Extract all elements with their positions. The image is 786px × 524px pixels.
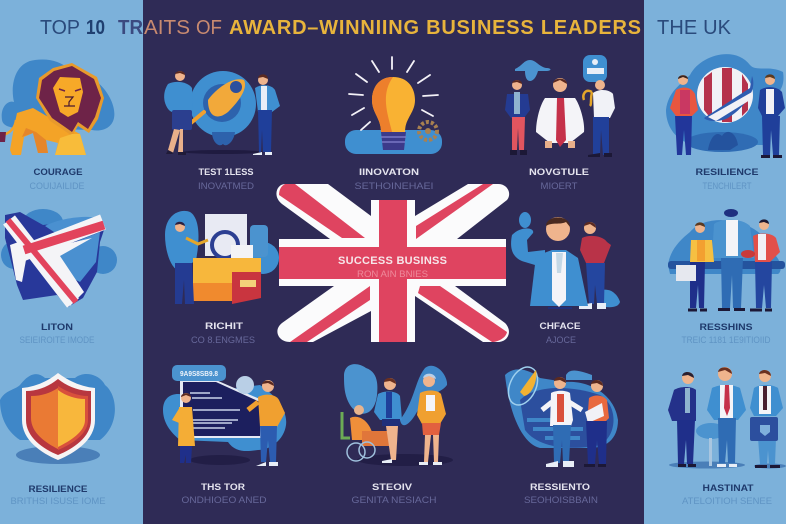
- label: steoiv: STEOIV: [372, 482, 413, 493]
- label: chface: AJOCE: [546, 335, 576, 345]
- label: chface: [540, 321, 580, 345]
- label: chface: CHFACE: [540, 321, 580, 332]
- label: courage: COURAGE: [34, 167, 82, 178]
- label: resshins: TREIC 1181 1E9ITIOIID: [682, 335, 771, 345]
- title: [40, 17, 732, 39]
- person: left woman in red: [670, 75, 698, 155]
- title: OF: [196, 17, 222, 39]
- title: AITS: [144, 17, 190, 39]
- label: liton: [20, 322, 94, 345]
- label: resilience top: [696, 167, 758, 191]
- illustration: resilience team with flag sphere: [666, 54, 785, 158]
- label: courage: COUIJAILIDE: [30, 181, 84, 191]
- person: left man: [676, 222, 714, 310]
- label: liton: LITON: [41, 322, 73, 333]
- title: 10: [86, 17, 105, 39]
- label: ths tor: THS TOR: [201, 482, 245, 493]
- label: richit: CO 8.ENGMES: [191, 335, 255, 345]
- panel: left column: [0, 0, 143, 524]
- icon: shield: [0, 373, 115, 464]
- label: novgtule: [529, 167, 589, 191]
- label: novgtule: MIOERT: [540, 181, 578, 191]
- label: innovaton: [354, 167, 434, 191]
- label: resshins: RESSHINS: [700, 322, 752, 333]
- panel: right column: [644, 0, 786, 524]
- person: right man in red: [741, 219, 780, 310]
- person: main man: [530, 217, 588, 309]
- illustration: presentation screen: [163, 365, 286, 466]
- label: ressiento: SEOHOISBBAIN: [524, 495, 598, 505]
- label: courage: [30, 167, 84, 191]
- label: resshins: [682, 322, 771, 345]
- icon: lion: [0, 59, 114, 155]
- person: man beside box: [168, 222, 208, 304]
- title: TOP: [40, 17, 80, 39]
- person: right man navy: [758, 74, 785, 158]
- person: man in navy: [668, 372, 696, 467]
- label: resilience top: RESILIENCE: [696, 167, 758, 178]
- label: ressiento: [524, 482, 598, 505]
- label: hastinat: [682, 483, 772, 506]
- person: left man in navy: [505, 80, 530, 155]
- label: ressiento: RESSIENTO: [530, 482, 590, 493]
- person: centre man: [707, 367, 746, 467]
- label: novgtule: NOVGTULE: [529, 167, 589, 178]
- title: TR: [118, 17, 144, 39]
- flag text: [338, 255, 447, 279]
- label: ths tor: ONDHIOEO ANED: [182, 495, 267, 505]
- person: right man: [584, 380, 609, 467]
- label: resilience bottom: [10, 484, 106, 506]
- illustration: presentation screen: 9A9S8SB9.8: [180, 371, 218, 378]
- illustration: box and certificate: [165, 211, 279, 304]
- person: second man: [579, 222, 611, 309]
- label: richit: [191, 321, 255, 345]
- label: liton: SEIEIROITE IMODE: [20, 335, 94, 345]
- illustration: wheelchair meeting: [342, 364, 453, 466]
- label: resilience bottom: BRITHSI ISUSE IOME: [10, 496, 106, 506]
- label: resilience bottom: RESILIENCE: [28, 484, 88, 495]
- title: THE UK: [657, 17, 732, 39]
- label: steoiv: [352, 482, 436, 505]
- person: right man in white: [583, 80, 615, 157]
- illustration: resiliento discussion: [503, 362, 618, 467]
- icon: union flag heart: [1, 209, 117, 307]
- person: right man: [750, 370, 783, 468]
- illustration: man raising hand: [511, 212, 620, 309]
- label: test 1less: TEST 1LESS: [198, 167, 254, 178]
- illustration: three men at rail: [668, 209, 785, 311]
- person: man in blue: [374, 378, 402, 463]
- person: central man: [536, 78, 584, 148]
- illustration: magnifier team: [164, 71, 280, 155]
- icon: light bulb with rays: [345, 57, 442, 154]
- graphic: union flag: [276, 184, 509, 342]
- person: left man: [164, 71, 193, 155]
- person: left man in white: [542, 377, 582, 467]
- label: ths tor: [182, 482, 267, 505]
- label: richit: RICHIT: [205, 321, 243, 332]
- label: innovaton: IINOVATON: [359, 167, 419, 178]
- flag text: SUCCESS BUSINSS: [338, 255, 447, 267]
- illustration: three business people: [505, 55, 615, 157]
- label: hastinat: ATELOITIOH SENEE: [682, 496, 772, 506]
- label: steoiv: GENITA NESIACH: [352, 495, 436, 505]
- person: centre man with hat: [712, 209, 754, 311]
- person: man in orange: [248, 380, 285, 466]
- label: innovaton: SETHOINEHAEI: [354, 181, 434, 191]
- flag text: RON AIN BNIES: [357, 269, 428, 279]
- label: hastinat: HASTINAT: [702, 483, 754, 494]
- person: seated person: [342, 405, 392, 461]
- label: test 1less: [198, 167, 255, 191]
- person: woman in yellow: [172, 393, 195, 463]
- label: test 1less: INOVATMED: [198, 181, 255, 191]
- person: right man: [253, 74, 280, 155]
- illustration: hastinat team: [668, 367, 786, 468]
- label: resilience top: TENCHILERT: [702, 181, 752, 191]
- title: AWARD–WINNIING BUSINESS LEADERS: [229, 17, 641, 39]
- person: woman in orange: [417, 374, 446, 465]
